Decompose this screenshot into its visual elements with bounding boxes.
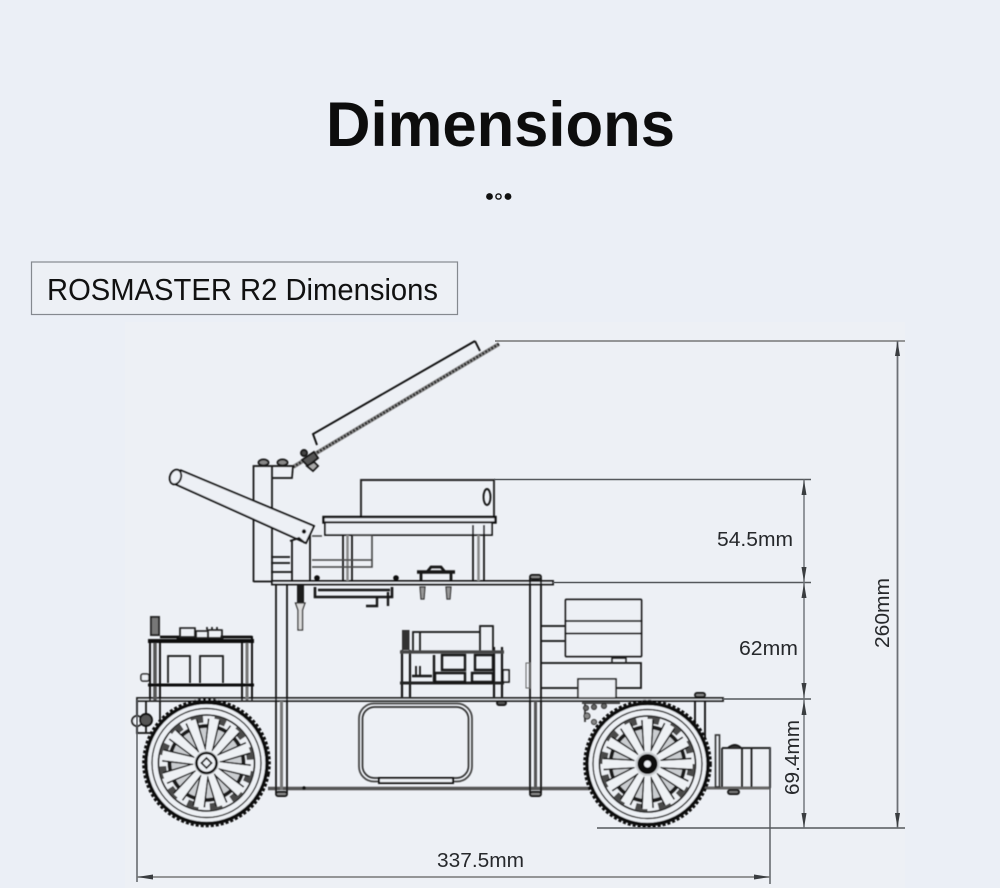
left wheel <box>134 691 279 835</box>
label: 69.4mm: 69.4mm <box>782 720 804 795</box>
camera arm <box>168 468 314 582</box>
label: 54.5mm: 54.5mm <box>717 529 793 551</box>
front bumper bracket <box>132 701 160 733</box>
dimension lines <box>137 341 905 884</box>
label: 62mm: 62mm <box>739 638 798 660</box>
drawing panel background <box>125 322 905 888</box>
middle controller stack <box>400 626 509 705</box>
label: 337.5mm: 337.5mm <box>437 850 524 872</box>
battery pack <box>526 600 642 698</box>
robot side-view drawing <box>132 341 770 835</box>
main deck and lower plate <box>137 698 770 790</box>
subtitle box: ROSMASTER R2 Dimensions <box>47 272 438 307</box>
decorative three dots <box>486 193 511 200</box>
front motor mount <box>582 703 620 724</box>
mast bracket <box>254 460 293 582</box>
title: Dimensions <box>326 90 675 160</box>
subtitle box <box>32 262 458 314</box>
right wheel <box>585 702 710 826</box>
deck window frame <box>359 704 472 783</box>
rear motor <box>716 735 770 794</box>
dimension arrowheads <box>137 341 900 880</box>
support posts <box>276 575 705 796</box>
upper plate <box>272 575 553 584</box>
under-plate parts <box>296 567 455 630</box>
label: 260mm: 260mm <box>872 578 894 648</box>
rear electronics stack <box>141 617 254 700</box>
phone holder arm <box>293 341 499 471</box>
lidar and mounting plate <box>312 480 496 582</box>
